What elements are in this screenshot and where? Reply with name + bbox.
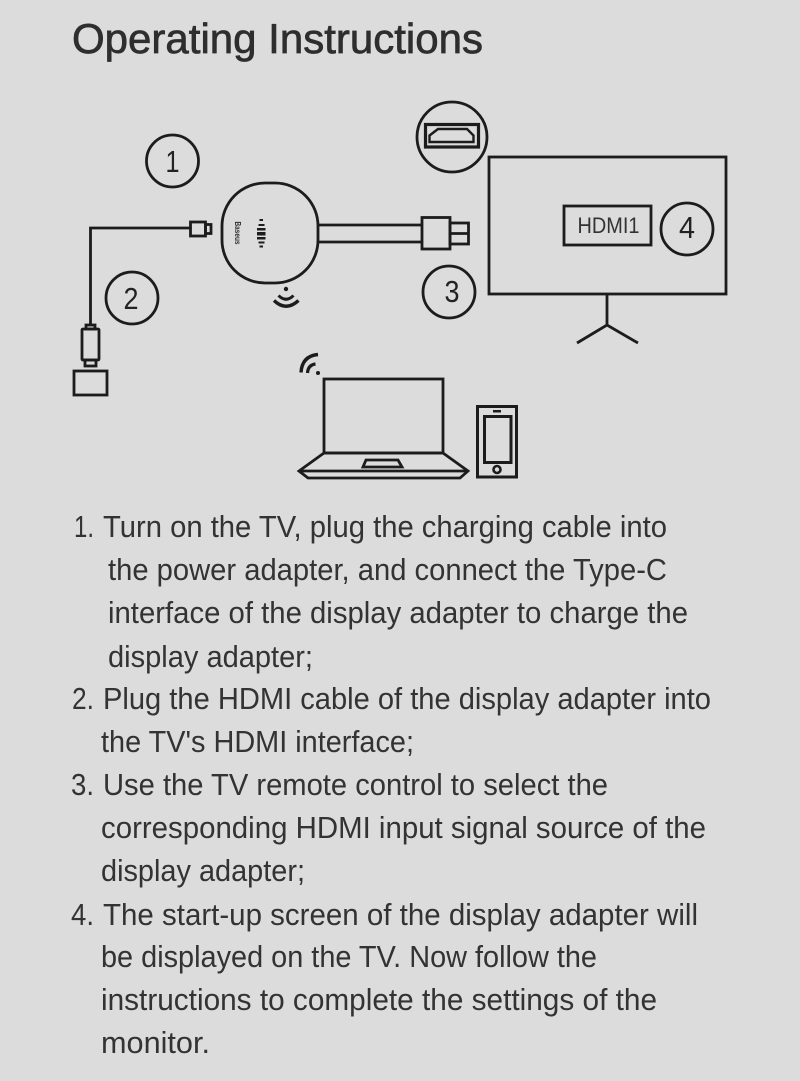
icon: laptop wireless signal xyxy=(301,354,320,375)
step 3 text: Use the TV remote control to select the xyxy=(103,767,608,802)
step 1 text: 1. xyxy=(74,509,94,544)
connection diagram xyxy=(74,102,726,478)
icon: smartphone xyxy=(478,406,516,477)
brand label: Baseus xyxy=(233,222,242,245)
step 4 text: The start-up screen of the display adapter will xyxy=(103,897,698,932)
step 2 text: the TV's HDMI interface; xyxy=(101,724,414,759)
step 1 text xyxy=(74,509,688,674)
HDMI1 source label: HDMI1 xyxy=(578,213,640,238)
step badge 4 xyxy=(661,203,713,255)
step 2 text: Plug the HDMI cable of the display adapter into xyxy=(103,681,711,716)
step 1 text: the power adapter, and connect the Type-C xyxy=(108,552,667,587)
step 4 text: 4. xyxy=(71,897,94,932)
step 1 text: Turn on the TV, plug the charging cable into xyxy=(103,509,667,544)
step badge 2: 2 xyxy=(124,281,138,316)
step 4 text: instructions to complete the settings of the xyxy=(101,982,657,1017)
step badge 3 xyxy=(423,266,475,318)
step 3 text: 3. xyxy=(71,767,94,802)
title: Operating Instructions xyxy=(72,15,483,62)
step 1 text: display adapter; xyxy=(108,639,313,674)
step 4 text xyxy=(71,897,698,1060)
step 4 text: monitor. xyxy=(101,1025,210,1060)
step 4 text: be displayed on the TV. Now follow the xyxy=(101,939,597,974)
step badge 3: 3 xyxy=(444,274,460,309)
icon: HDMI cable and plug xyxy=(318,218,468,249)
instruction list xyxy=(71,509,711,1060)
step 2 text xyxy=(72,681,711,759)
step badge 2 xyxy=(106,272,158,324)
step 3 text: corresponding HDMI input signal source of the xyxy=(101,810,706,845)
step 3 text xyxy=(71,767,706,888)
icon: display adapter dongle xyxy=(222,183,318,283)
icon: television xyxy=(489,157,726,343)
adapter indicator bars xyxy=(257,219,266,248)
icon: adapter wireless signal xyxy=(274,287,298,306)
step 2 text: 2. xyxy=(72,681,94,716)
HDMI1 source label xyxy=(564,206,651,245)
step badge 1: 1 xyxy=(166,144,180,179)
icon: charging cable with power adapter xyxy=(74,222,211,395)
step badge 1 xyxy=(146,135,198,187)
step 3 text: display adapter; xyxy=(101,853,305,888)
step 1 text: interface of the display adapter to charge the xyxy=(108,595,688,630)
icon: laptop xyxy=(299,379,468,478)
icon: HDMI port xyxy=(417,102,487,172)
step badge 4: 4 xyxy=(679,210,695,245)
